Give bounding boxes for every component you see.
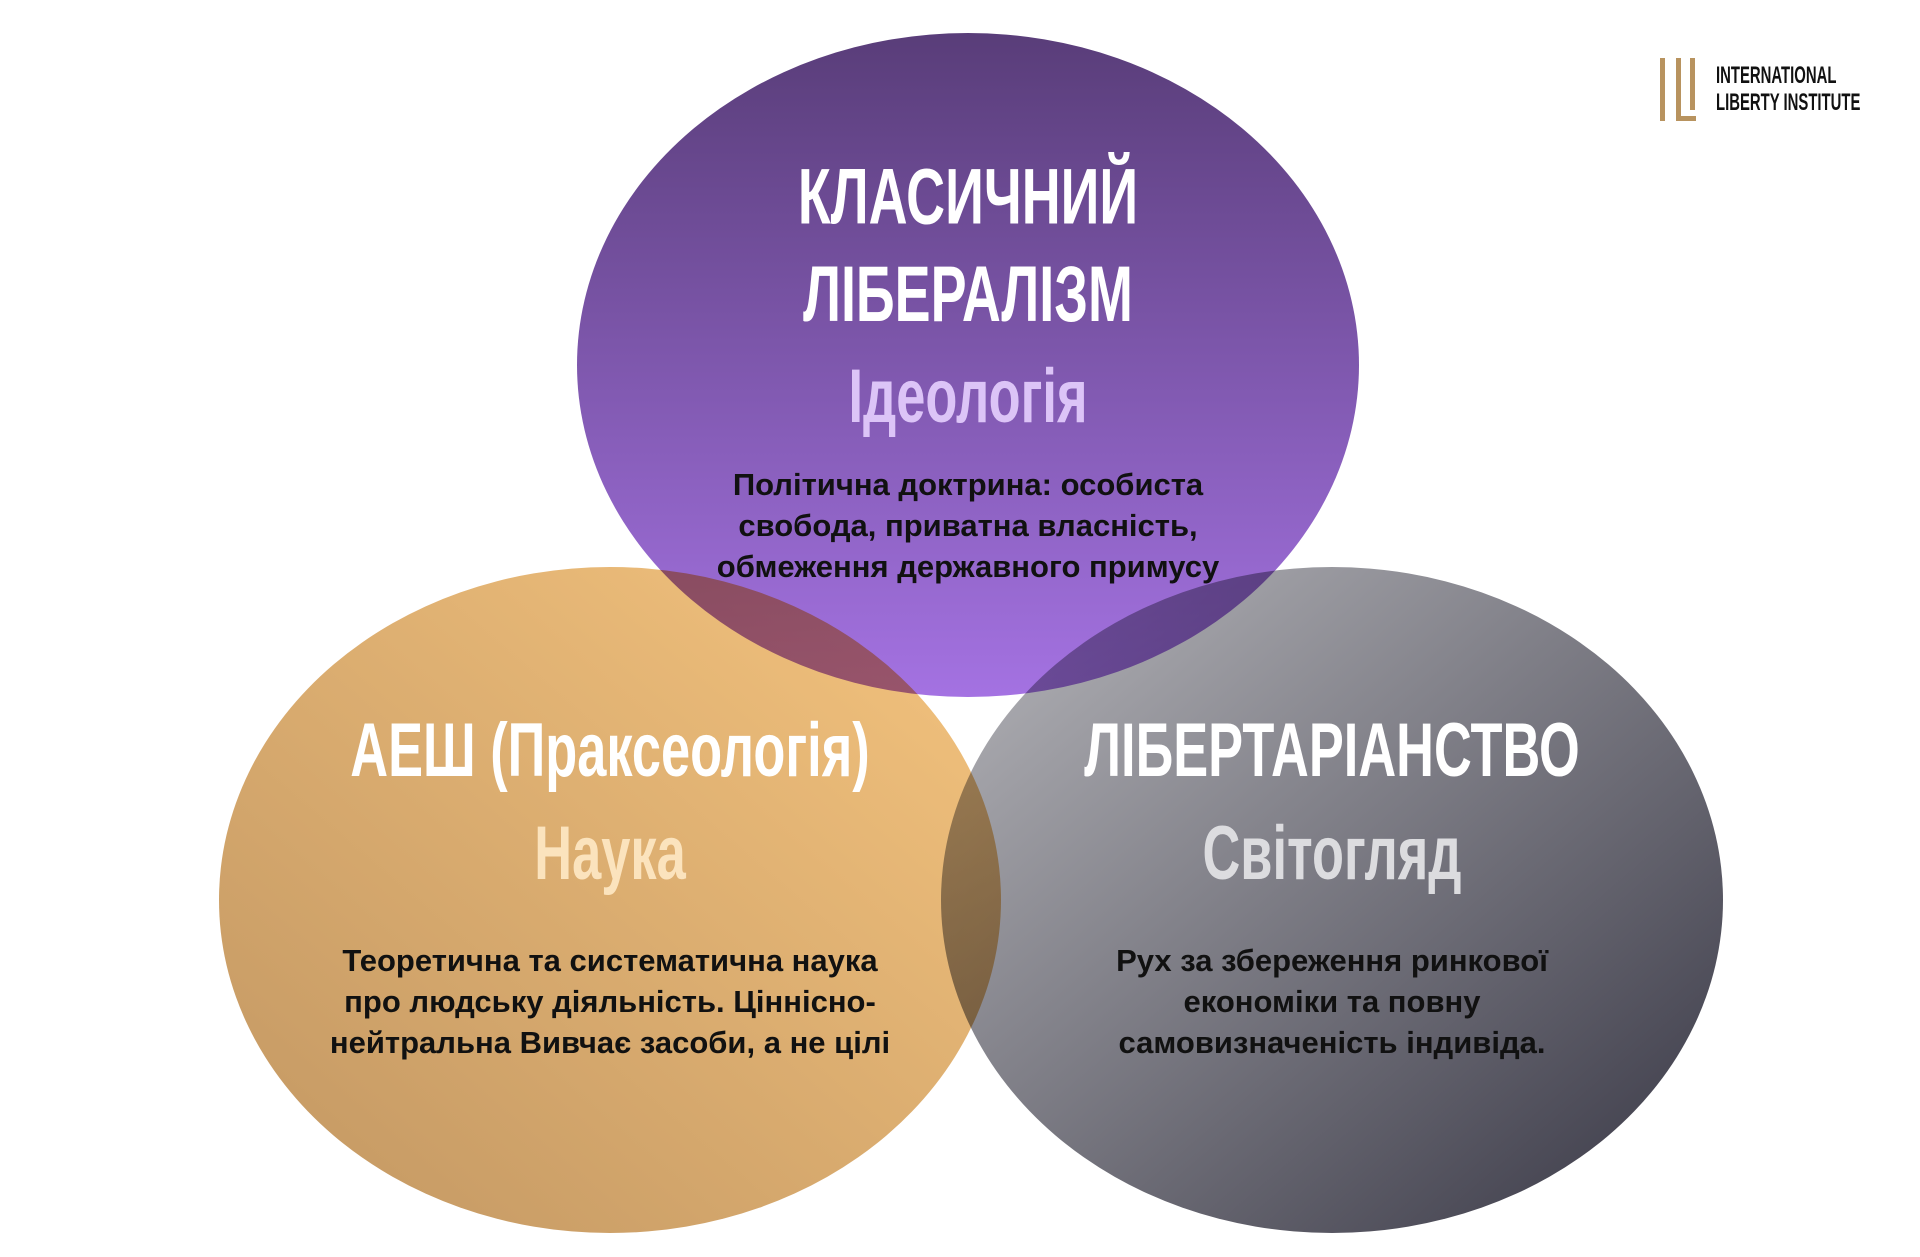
text: worldview description [1116,943,1548,1060]
text: science description: про людську діяльність. Ціннісно- [344,984,876,1019]
title: classical liberalism: КЛАСИЧНИЙ [798,153,1138,240]
title: classical liberalism [798,152,1138,338]
text: science description: нейтральна Вивчає засоби, а не цілі [330,1025,890,1060]
title: classical liberalism: ЛІБЕРАЛІЗМ [803,250,1133,338]
logo [1660,58,1860,121]
subtitle: worldview: Світогляд [1202,810,1462,896]
text: science description [330,943,890,1060]
circle: libertarianism [941,567,1723,1233]
logo: LIBERTY INSTITUTE [1716,89,1860,116]
logo: INTERNATIONAL [1716,62,1836,89]
title: libertarianism: ЛІБЕРТАРІАНСТВО [1084,707,1580,793]
text: ideology description: свобода, приватна власність, [738,508,1198,543]
subtitle: science: Наука [534,810,686,896]
text: ideology description: обмеження державного примусу [717,549,1219,584]
text: worldview description: економіки та повну [1184,984,1480,1019]
text: science description: Теоретична та систематична наука [342,943,878,978]
text: ideology description: Політична доктрина: особиста [733,467,1203,502]
text: worldview description: самовизначеність індивіда. [1119,1025,1545,1060]
text: worldview description: Рух за збереження ринкової [1116,943,1548,978]
circle: AES praxeology [219,567,1001,1233]
subtitle: ideology: Ідеологія [848,353,1088,439]
title: AES: АЕШ (Праксеологія) [350,707,870,793]
circle: classical liberalism [577,33,1359,697]
text: ideology description [717,467,1219,584]
